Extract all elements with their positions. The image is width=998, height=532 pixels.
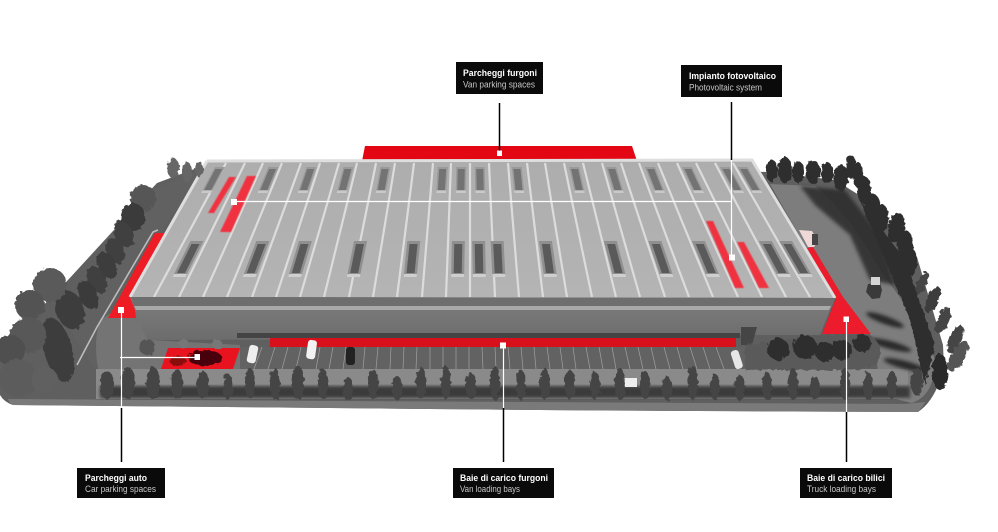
front wall <box>130 297 835 340</box>
skylights front row <box>172 241 813 277</box>
red zone: truck loading bays <box>807 247 871 334</box>
label: van parking spaces <box>456 62 543 94</box>
leader: van loading bays <box>500 342 506 462</box>
tree shadows right <box>800 186 927 375</box>
red zone: van loading bays <box>270 338 736 347</box>
truck <box>799 230 818 247</box>
truck cab <box>812 234 818 245</box>
canopy <box>237 333 740 338</box>
leader: car parking <box>118 307 200 462</box>
van <box>730 349 744 370</box>
leader: photovoltaic <box>231 102 735 260</box>
rear and right tree row <box>766 155 973 390</box>
front tree row <box>100 366 923 401</box>
leader lines and markers <box>118 102 849 462</box>
van <box>306 340 317 360</box>
skylights rear row <box>201 167 763 193</box>
car <box>346 347 355 365</box>
label: photovoltaic system: Impianto fotovoltaico <box>689 71 776 82</box>
label: truck loading bays: Baie di carico bilici <box>807 473 885 484</box>
parked truck <box>866 283 882 299</box>
building <box>130 160 835 345</box>
label: van loading bays: Baie di carico furgoni <box>460 473 548 484</box>
red zone: car parking spaces <box>161 348 240 369</box>
left tree cluster <box>0 185 156 397</box>
label: van loading bays <box>453 468 554 498</box>
label: car parking spaces: Parcheggi auto <box>85 473 147 484</box>
front tree shadows <box>100 386 910 398</box>
label: car parking spaces: Car parking spaces <box>85 484 156 495</box>
label: photovoltaic system: Photovoltaic system <box>689 82 762 94</box>
roof edges <box>130 160 835 298</box>
red zone: car parking access strip <box>108 233 165 318</box>
label: truck loading bays: Truck loading bays <box>807 484 876 495</box>
label: car parking spaces <box>77 468 165 498</box>
leader: van parking <box>497 103 502 156</box>
wall parapet band <box>131 297 835 306</box>
parking lot <box>240 347 745 369</box>
van <box>246 344 259 364</box>
vehicles <box>246 230 882 387</box>
label: photovoltaic system <box>681 65 782 97</box>
label: truck loading bays <box>800 468 892 498</box>
red zone: van parking spaces <box>362 146 637 161</box>
ground plot <box>0 165 944 412</box>
roof <box>130 160 835 298</box>
label: van parking spaces: Parcheggi furgoni <box>463 68 537 79</box>
road edge line <box>77 230 158 365</box>
entrance block <box>741 327 757 345</box>
top-left trees <box>167 158 203 182</box>
parked truck cab <box>871 277 880 285</box>
shrubs by building <box>139 334 880 370</box>
roof stripes <box>154 163 810 297</box>
red zones: photovoltaic roof panels <box>208 176 769 288</box>
label: van parking spaces: Van parking spaces <box>463 80 535 90</box>
label: van loading bays: Van loading bays <box>460 484 520 495</box>
van <box>625 378 637 387</box>
parking bay lines <box>254 347 724 369</box>
leader: truck loading bays <box>844 316 849 462</box>
wall light strip <box>134 306 831 310</box>
